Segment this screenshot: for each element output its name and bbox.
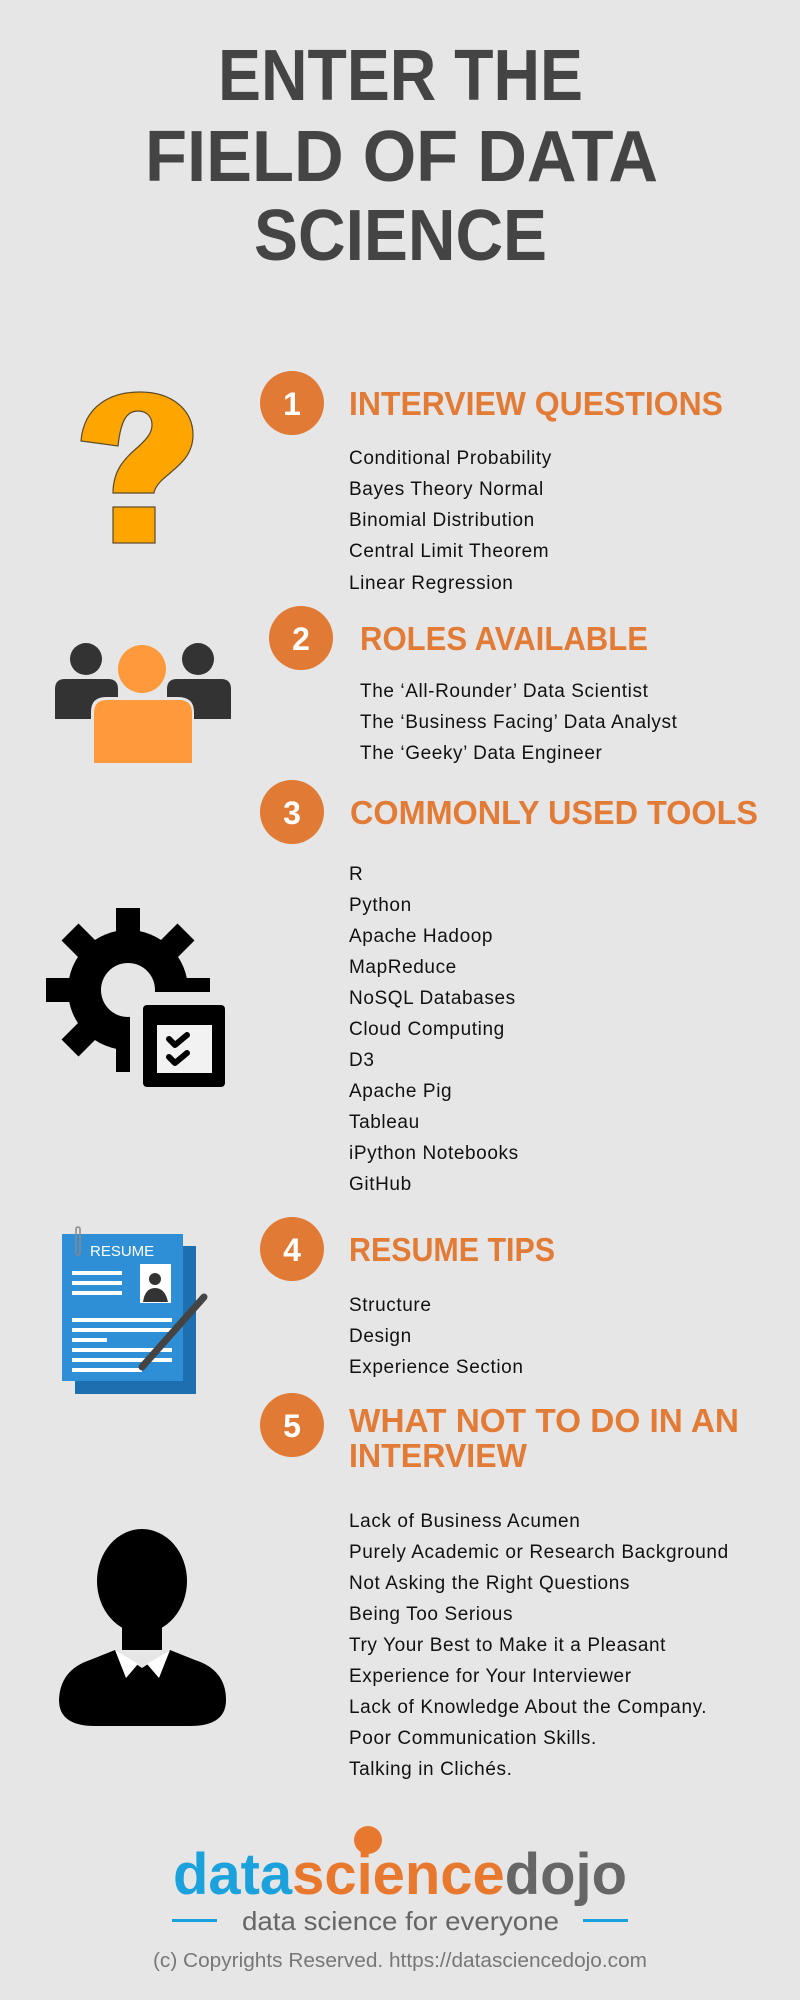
section 5: what not to do: INTERVIEW (349, 1437, 528, 1474)
section 3: tools: Apache Hadoop (349, 926, 493, 947)
section 5: what not to do: Lack of Business Acumen (349, 1511, 580, 1532)
section 1: interview questions: Bayes Theory Normal (349, 479, 544, 500)
icon: person silhouette (59, 1529, 226, 1726)
section 3: tools: 3 (283, 795, 301, 831)
section 2: roles: The ‘Business Facing’ Data Analyst (360, 712, 678, 733)
section 5: what not to do: WHAT NOT TO DO IN AN (349, 1402, 739, 1439)
section 2: roles (269, 606, 678, 764)
section 3: tools: Cloud Computing (349, 1019, 505, 1040)
section 1: interview questions: 1 (283, 386, 301, 422)
section 4: resume tips: Experience Section (349, 1357, 524, 1378)
section 2: roles: The ‘All-Rounder’ Data Scientist (360, 681, 649, 702)
section 3: tools: iPython Notebooks (349, 1143, 519, 1164)
section 5: what not to do: Experience for Your Interviewer (349, 1666, 632, 1687)
section 1: interview questions: INTERVIEW QUESTIONS (349, 385, 723, 422)
section 5: what not to do: Being Too Serious (349, 1604, 513, 1625)
section 1: interview questions: Central Limit Theorem (349, 541, 549, 562)
icon: resume: RESUME (90, 1243, 154, 1260)
icon: question mark (81, 392, 193, 543)
title: SCIENCE (254, 196, 547, 276)
section 3: tools: R (349, 864, 363, 885)
section 1: interview questions: Conditional Probability (349, 448, 552, 469)
copyright: (c) Copyrights Reserved. https://datasciencedojo.com (153, 1950, 647, 1972)
icon: people (55, 643, 231, 765)
section 3: tools: D3 (349, 1050, 374, 1071)
section 4: resume tips (260, 1217, 555, 1378)
section 2: roles: The ‘Geeky’ Data Engineer (360, 743, 602, 764)
section 3: tools: Apache Pig (349, 1081, 452, 1102)
section 1: interview questions (260, 371, 723, 594)
logo (172, 1826, 628, 1936)
section 3: tools: COMMONLY USED TOOLS (350, 794, 758, 831)
section 3: tools (260, 780, 758, 1195)
section 3: tools: Python (349, 895, 412, 916)
logo: datasciencedojo (173, 1842, 627, 1907)
section 5: what not to do: Talking in Clichés. (349, 1759, 512, 1780)
logo: data science for everyone (242, 1906, 559, 1936)
section 5: what not to do: Try Your Best to Make it a Pleasant (349, 1635, 666, 1656)
section 1: interview questions: Binomial Distribution (349, 510, 535, 531)
section 1: interview questions: Linear Regression (349, 573, 513, 594)
section 3: tools: NoSQL Databases (349, 988, 516, 1009)
section 3: tools: GitHub (349, 1174, 412, 1195)
section 3: tools: Tableau (349, 1112, 420, 1133)
section 5: what not to do: Not Asking the Right Questions (349, 1573, 630, 1594)
title: ENTER THE (218, 36, 583, 116)
section 5: what not to do: Lack of Knowledge About the Company. (349, 1697, 707, 1718)
section 2: roles: ROLES AVAILABLE (360, 620, 648, 657)
section 5: what not to do: Poor Communication Skills. (349, 1728, 597, 1749)
icon: gear with checklist (46, 908, 230, 1092)
section 5: what not to do: 5 (283, 1408, 301, 1444)
section 5: what not to do (260, 1393, 739, 1780)
title: FIELD OF DATA (145, 117, 658, 197)
section 4: resume tips: Design (349, 1326, 412, 1347)
section 3: tools: MapReduce (349, 957, 457, 978)
icon: resume (62, 1227, 204, 1394)
title (145, 36, 658, 276)
section 4: resume tips: RESUME TIPS (349, 1231, 555, 1268)
section 2: roles: 2 (292, 621, 310, 657)
section 4: resume tips: 4 (283, 1232, 301, 1268)
section 4: resume tips: Structure (349, 1295, 432, 1316)
section 5: what not to do: Purely Academic or Research Background (349, 1542, 729, 1563)
